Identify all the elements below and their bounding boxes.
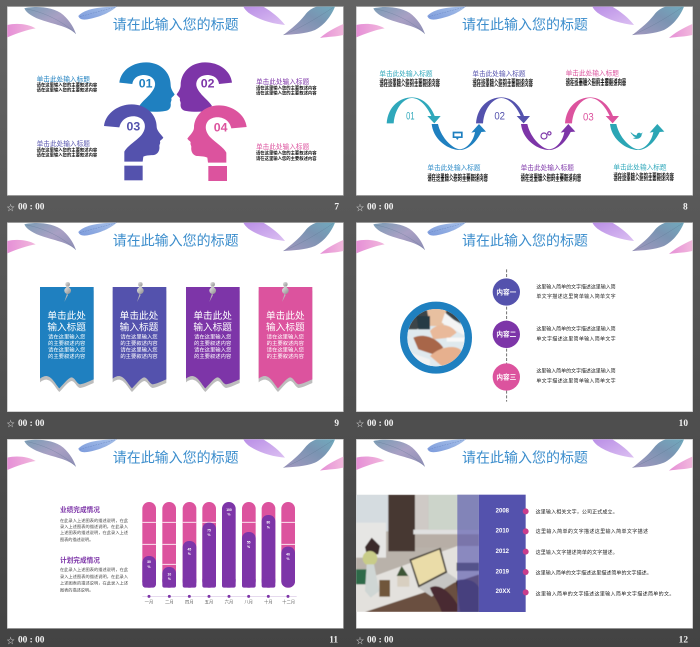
month axis: 八月 bbox=[244, 600, 253, 606]
note 4: 请在这里输入您 bbox=[267, 345, 305, 353]
year labels bbox=[496, 508, 510, 595]
note 4: 的主要叙述内容 bbox=[267, 352, 305, 360]
label top 1 bbox=[379, 69, 441, 88]
photo: hands on documents bbox=[407, 309, 465, 367]
label 03: 单击此处输入标题 bbox=[37, 139, 90, 148]
slide 10: circle photo and three items bbox=[356, 223, 693, 429]
timeline dots bbox=[523, 508, 529, 595]
label 01: 请在这里输入您的主要叙述内容 bbox=[37, 87, 98, 94]
label 01: 单击此处输入标题 bbox=[37, 74, 90, 83]
year labels: 2008 bbox=[496, 508, 510, 514]
text block: performance: 在此录入上述图表的描述说明，在此 bbox=[60, 517, 129, 523]
icon: gears bbox=[541, 132, 551, 139]
node 1: 内容一 bbox=[496, 287, 517, 296]
bar 六月 100%: 100 bbox=[226, 508, 232, 512]
item text 3: 这里输入简单的文字描述这里输入简 bbox=[536, 368, 616, 375]
year labels: 20XX bbox=[496, 589, 510, 595]
footer: ☆ bbox=[356, 204, 364, 213]
footer bbox=[356, 203, 688, 213]
head 02: 02 bbox=[201, 77, 215, 91]
timeline text 5: 这里输入简单的文字描述这里输入简单文字描述简单的文。 bbox=[536, 591, 674, 598]
arrow 02 bbox=[476, 97, 530, 123]
label 02 bbox=[256, 77, 317, 97]
label top 1: 请在这里输入您的主要叙述内容 bbox=[379, 78, 441, 85]
footer: 00 : 00 bbox=[18, 419, 45, 429]
footer: 12 bbox=[679, 636, 688, 646]
arrow 03 bbox=[565, 97, 619, 123]
label bottom 3: 单击此处输入标题 bbox=[613, 163, 667, 172]
photo: laptop on desk bbox=[356, 495, 479, 612]
note 2: 单击此处 bbox=[120, 310, 159, 322]
note 3: 请在这里输入您 bbox=[194, 345, 232, 353]
bar 五月 75%: % bbox=[208, 533, 211, 537]
bar 十月 80%: 80 bbox=[266, 521, 270, 525]
slide 8: wave process bbox=[356, 7, 693, 213]
label top 1: 单击此处输入标题 bbox=[379, 69, 433, 78]
footer bbox=[356, 636, 688, 646]
arrow purple bbox=[521, 124, 575, 150]
month axis: 二月 bbox=[165, 600, 174, 606]
note 2 bbox=[113, 282, 166, 392]
head 04: 04 bbox=[214, 121, 228, 135]
slide panel bbox=[356, 223, 693, 412]
label bottom 2 bbox=[521, 163, 582, 183]
month axis: 五月 bbox=[205, 600, 213, 606]
year labels: 2019 bbox=[496, 569, 510, 575]
footer bbox=[7, 636, 338, 646]
note 2: 的主要叙述内容 bbox=[120, 339, 158, 347]
footer bbox=[7, 203, 339, 213]
footer: 00 : 00 bbox=[367, 203, 394, 213]
bar 四月 45%: 45 bbox=[187, 547, 191, 551]
label 04 bbox=[256, 142, 317, 162]
dashed timeline bbox=[505, 269, 508, 402]
footer: 10 bbox=[679, 419, 688, 429]
label top 1: 请在这里输入您的主要叙述内容 bbox=[379, 81, 441, 88]
bar 二月 10%: 10 bbox=[167, 572, 171, 576]
label top 2: 请在这里输入您的主要叙述内容 bbox=[472, 78, 534, 85]
note 3: 请在这里输入您 bbox=[194, 332, 232, 340]
note 2: 输入标题 bbox=[120, 322, 159, 334]
slide panel bbox=[356, 7, 693, 195]
bar 四月 45% bbox=[183, 502, 196, 588]
label 04: 请在这里输入您的主要叙述内容 bbox=[256, 155, 317, 162]
arrow 01 bbox=[387, 97, 441, 123]
timeline text 3: 这里输入文字描述简单的文字描述。 bbox=[536, 549, 618, 556]
bar chart bbox=[142, 502, 295, 588]
note 1: 单击此处 bbox=[47, 310, 86, 322]
text block: performance: 图表的描述说明。 bbox=[60, 536, 93, 542]
label 03: 请在这里输入您的主要叙述内容 bbox=[37, 151, 98, 158]
text block: plan: 在此录入上述图表的描述说明，在此 bbox=[60, 566, 129, 572]
note 2: 请在这里输入您 bbox=[120, 345, 158, 353]
label 01 bbox=[37, 74, 98, 94]
label 02: 单击此处输入标题 bbox=[256, 77, 310, 86]
item text 1: 这里输入简单的文字描述这里输入简 bbox=[536, 283, 616, 290]
slide panel bbox=[7, 223, 343, 412]
text block: plan: 图表的描述说明。 bbox=[60, 586, 93, 592]
label 03: 请在这里输入您的主要叙述内容 bbox=[37, 146, 98, 153]
head 02 bbox=[177, 62, 232, 112]
arrow blue bbox=[432, 124, 486, 150]
label top 3 bbox=[566, 68, 627, 88]
feather decoration bbox=[356, 7, 692, 38]
label top 3: 单击此处输入标题 bbox=[566, 68, 619, 77]
title: 请在此输入您的标题 bbox=[462, 17, 588, 33]
slide 7: question mark heads bbox=[7, 7, 343, 213]
label 02: 请在这里输入您的主要叙述内容 bbox=[256, 90, 317, 97]
timeline text 2: 这里输入简单的文字描述这里输入简单文字描述 bbox=[536, 528, 648, 535]
footer: 00 : 00 bbox=[367, 419, 394, 429]
head 01 bbox=[119, 62, 175, 112]
month axis: 一月 bbox=[145, 600, 153, 606]
node 2 bbox=[493, 321, 520, 348]
label bottom 1 bbox=[427, 163, 489, 183]
bar 五月 75%: 75 bbox=[207, 528, 211, 532]
title: 请在此输入您的标题 bbox=[462, 449, 588, 465]
bar 十月 80% bbox=[262, 502, 275, 588]
feather decoration bbox=[7, 439, 343, 471]
node 1 bbox=[493, 278, 520, 306]
note 2: 请在这里输入您 bbox=[120, 332, 158, 340]
footer: ☆ bbox=[356, 637, 364, 646]
text block: plan: 计划完成情况 bbox=[60, 555, 100, 564]
footer: ☆ bbox=[7, 204, 15, 213]
item text 2: 这里输入简单的文字描述这里输入简 bbox=[536, 325, 616, 332]
note 3: 的主要叙述内容 bbox=[194, 352, 232, 360]
head 01: 01 bbox=[139, 77, 153, 91]
node 2: 内容二 bbox=[496, 330, 517, 339]
head 03: 03 bbox=[126, 119, 140, 133]
note 4: 请在这里输入您 bbox=[267, 332, 305, 340]
node 3: 内容三 bbox=[496, 372, 517, 381]
year labels: 2012 bbox=[496, 549, 510, 555]
bar 一月 30% bbox=[142, 502, 156, 588]
bar 五月 75% bbox=[202, 502, 216, 588]
title: 请在此输入您的标题 bbox=[113, 233, 239, 249]
text block: performance: 业绩完成情况 bbox=[60, 505, 100, 514]
month axis bbox=[142, 595, 297, 606]
step numbers: 01 bbox=[406, 111, 415, 123]
step numbers: 03 bbox=[583, 111, 594, 123]
footer: 8 bbox=[683, 203, 688, 213]
label top 3: 请在这里输入您的主要叙述内容 bbox=[566, 77, 627, 84]
step numbers: 02 bbox=[494, 111, 505, 123]
bar 四月 45%: % bbox=[188, 552, 191, 556]
head 04 bbox=[187, 105, 247, 181]
footer: ☆ bbox=[7, 637, 15, 646]
footer bbox=[356, 419, 688, 429]
title: 请在此输入您的标题 bbox=[462, 233, 588, 249]
month axis: 六月 bbox=[225, 599, 233, 606]
label bottom 2: 请在这里输入您的主要叙述内容 bbox=[521, 172, 582, 179]
feather decoration bbox=[7, 7, 343, 38]
head 03 bbox=[104, 104, 163, 180]
slide panel bbox=[7, 439, 343, 628]
item text 3 bbox=[536, 368, 616, 384]
footer: 00 : 00 bbox=[367, 636, 394, 646]
text block: performance: 上述图表的描述说明，在此录入上述 bbox=[60, 529, 128, 535]
note 3 bbox=[186, 282, 240, 392]
note 1 bbox=[40, 282, 94, 392]
label bottom 1: 单击此处输入标题 bbox=[427, 163, 481, 172]
feather decoration bbox=[7, 223, 343, 254]
step numbers bbox=[406, 111, 594, 123]
note 2: 的主要叙述内容 bbox=[120, 352, 158, 360]
slide panel bbox=[356, 439, 693, 628]
item text 1: 单文字描述这里简单输入简单文字 bbox=[536, 293, 616, 300]
bar 八月 55% bbox=[242, 502, 256, 588]
label bottom 3: 请在这里输入您的主要叙述内容 bbox=[613, 172, 675, 179]
footer: 7 bbox=[334, 203, 339, 213]
photo ring bbox=[404, 305, 468, 370]
label bottom 2: 单击此处输入标题 bbox=[521, 163, 574, 172]
slide 11: capsule bar chart bbox=[7, 439, 343, 646]
year panel bbox=[479, 495, 526, 612]
note 1: 请在这里输入您 bbox=[48, 332, 86, 340]
month axis: 四月 bbox=[185, 600, 194, 606]
note 4: 的主要叙述内容 bbox=[267, 339, 305, 347]
bar 十月 80%: % bbox=[267, 525, 270, 529]
label bottom 1: 请在这里输入您的主要叙述内容 bbox=[427, 176, 489, 183]
item text 3: 单文字描述这里简单输入简单文字 bbox=[536, 377, 616, 384]
text block: plan bbox=[60, 555, 129, 592]
footer: 00 : 00 bbox=[18, 636, 45, 646]
label 02: 请在这里输入您的主要叙述内容 bbox=[256, 84, 317, 91]
label bottom 3 bbox=[613, 163, 675, 182]
label bottom 3: 请在这里输入您的主要叙述内容 bbox=[613, 175, 675, 182]
footer: 00 : 00 bbox=[18, 203, 45, 213]
icon: chat bubble bbox=[453, 132, 463, 140]
text block: plan: 录入上述图表的描述说明，在此录入 bbox=[60, 573, 128, 579]
bar 十二月 40%: % bbox=[287, 557, 290, 561]
title: 请在此输入您的标题 bbox=[113, 17, 239, 33]
label bottom 1: 请在这里输入您的主要叙述内容 bbox=[427, 172, 489, 179]
note 1: 的主要叙述内容 bbox=[48, 339, 86, 347]
bar 二月 10% bbox=[162, 502, 176, 588]
footer: 11 bbox=[329, 636, 338, 646]
item text 1 bbox=[536, 283, 616, 300]
bar 八月 55%: % bbox=[247, 545, 250, 549]
note 4: 输入标题 bbox=[266, 322, 305, 334]
label 04: 单击此处输入标题 bbox=[256, 142, 310, 151]
bar 十二月 40%: 40 bbox=[286, 552, 290, 556]
note 1: 的主要叙述内容 bbox=[48, 352, 86, 360]
item text 2: 单文字描述这里简单输入简单文字 bbox=[536, 335, 616, 342]
slide panel bbox=[7, 7, 343, 195]
item text 2 bbox=[536, 325, 616, 342]
feather decoration bbox=[356, 439, 692, 471]
arrow teal bbox=[610, 124, 664, 150]
label top 2: 单击此处输入标题 bbox=[472, 69, 526, 78]
note 1: 输入标题 bbox=[47, 322, 86, 334]
footer bbox=[7, 419, 339, 429]
month axis: 十二月 bbox=[282, 599, 295, 606]
label top 2: 请在这里输入您的主要叙述内容 bbox=[472, 81, 534, 88]
label 03 bbox=[37, 139, 98, 158]
note 1: 请在这里输入您 bbox=[48, 345, 86, 353]
bar 六月 100%: % bbox=[228, 513, 231, 517]
note 3: 单击此处 bbox=[193, 310, 232, 322]
footer: ☆ bbox=[7, 420, 15, 429]
label top 2 bbox=[472, 69, 534, 88]
label top 3: 请在这里输入您的主要叙述内容 bbox=[566, 81, 627, 88]
title: 请在此输入您的标题 bbox=[113, 449, 239, 465]
bar 六月 100% bbox=[222, 502, 236, 588]
footer: ☆ bbox=[356, 420, 364, 429]
bar 二月 10%: % bbox=[168, 577, 171, 581]
timeline text 4: 这里输入简单的文字描述这里描述简单的文字描述。 bbox=[536, 569, 652, 576]
label 04: 请在这里输入您的主要叙述内容 bbox=[256, 150, 317, 157]
note 3: 的主要叙述内容 bbox=[194, 339, 232, 347]
slide 12: timeline with photo bbox=[356, 439, 693, 646]
note 3: 输入标题 bbox=[193, 322, 232, 334]
bar 一月 30%: % bbox=[148, 565, 151, 569]
icon: bird bbox=[631, 132, 643, 139]
label bottom 2: 请在这里输入您的主要叙述内容 bbox=[521, 176, 582, 183]
timeline text 1: 这里输入相关文字，公司正式成立。 bbox=[536, 508, 618, 515]
label 01: 请在这里输入您的主要叙述内容 bbox=[37, 82, 98, 89]
bar 一月 30%: 30 bbox=[147, 560, 151, 564]
slide 9: pinned notes bbox=[7, 223, 343, 429]
footer: 9 bbox=[334, 419, 339, 429]
bar 八月 55%: 55 bbox=[247, 540, 251, 544]
year labels: 2010 bbox=[496, 529, 510, 535]
month axis: 十月 bbox=[264, 599, 273, 606]
text block: plan: 上述图表的描述说明，在此录入上述 bbox=[60, 579, 128, 585]
photo overlay band bbox=[457, 495, 479, 612]
note 4: 单击此处 bbox=[266, 310, 305, 322]
text block: performance bbox=[60, 505, 129, 542]
bar 十二月 40% bbox=[281, 502, 295, 588]
note 4 bbox=[259, 282, 312, 392]
node 3 bbox=[493, 363, 520, 391]
feather decoration bbox=[356, 223, 692, 254]
text block: performance: 录入上述图表的描述说明，在此录入 bbox=[60, 523, 128, 529]
